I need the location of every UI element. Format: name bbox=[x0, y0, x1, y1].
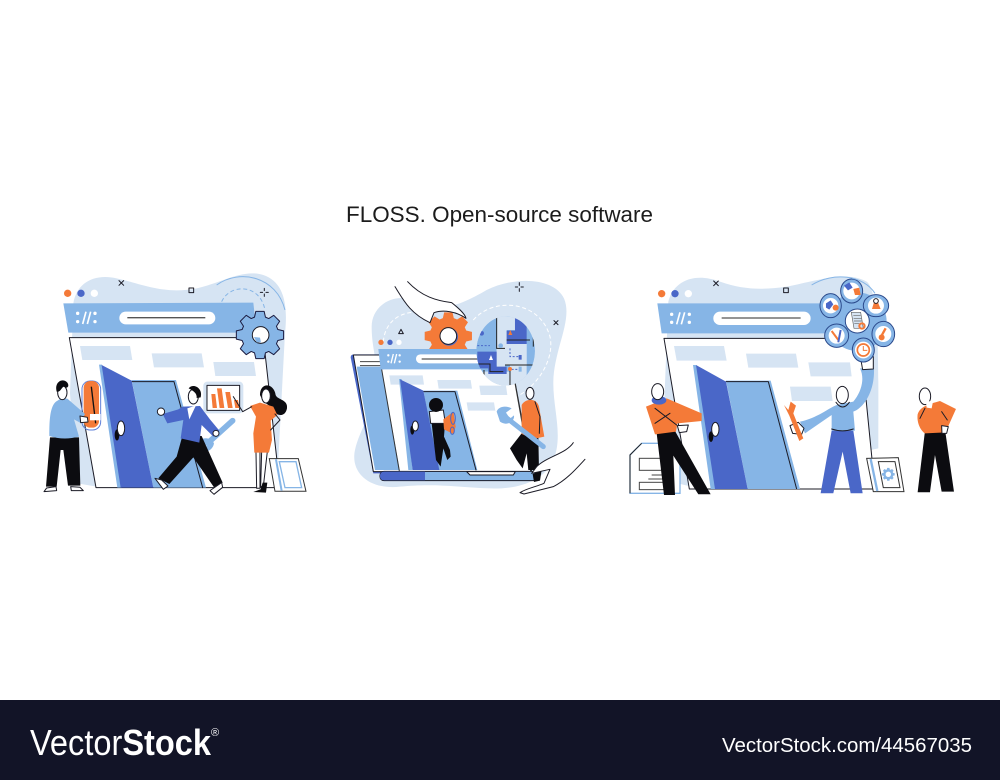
content cards bbox=[389, 375, 507, 411]
centre document bbox=[845, 309, 869, 333]
person holding door bbox=[646, 384, 711, 495]
woman with megaphone bbox=[429, 398, 456, 467]
footer image id: VectorStock.com/44567035 bbox=[722, 735, 972, 757]
decorative arcs bbox=[217, 277, 285, 310]
door bbox=[399, 379, 477, 470]
marks bbox=[399, 283, 558, 334]
petal: tools bbox=[825, 324, 849, 347]
wrench bbox=[201, 421, 233, 451]
gear bbox=[236, 311, 284, 359]
address bar bbox=[657, 303, 853, 333]
petal: clock bbox=[852, 338, 874, 362]
repair man with wrench bbox=[497, 387, 544, 470]
browser page bbox=[69, 338, 280, 488]
petal: blocks bbox=[841, 279, 863, 303]
picture frame with gear bbox=[867, 458, 904, 492]
petal: person bbox=[863, 295, 889, 317]
floppy disk bbox=[630, 443, 680, 493]
petal: cube bbox=[820, 294, 841, 318]
orange gear bbox=[425, 312, 472, 360]
outer arc bbox=[812, 277, 875, 293]
panel: middle illustration, laptop and hands bbox=[351, 281, 585, 494]
title: FLOSS. Open-source software bbox=[346, 202, 653, 227]
footer band bbox=[0, 700, 1000, 780]
background blob bbox=[70, 273, 286, 487]
slider control bbox=[82, 381, 101, 430]
bar chart card bbox=[203, 382, 243, 413]
laptop screen bbox=[351, 354, 532, 473]
dashed arcs bbox=[383, 305, 551, 397]
content cards bbox=[674, 346, 852, 401]
panel: right illustration, configuration and tools bbox=[630, 277, 956, 495]
window control dots bbox=[64, 290, 98, 297]
browser address bar bbox=[63, 303, 257, 333]
bottom hand holding laptop bbox=[520, 443, 585, 494]
person on the right thinking bbox=[917, 388, 956, 492]
door bbox=[99, 365, 206, 488]
footer logo: VectorStock bbox=[30, 722, 212, 763]
marks bbox=[714, 281, 788, 293]
background blob bbox=[663, 277, 878, 487]
door bbox=[693, 365, 800, 489]
address bar bbox=[378, 349, 483, 369]
woman with orange dress bbox=[233, 385, 287, 493]
browser page bbox=[664, 338, 875, 489]
centre person reaching up bbox=[784, 357, 874, 493]
cross and square marks bbox=[119, 281, 268, 296]
laptop base bbox=[380, 471, 537, 481]
panel: left illustration, team at the open door bbox=[44, 273, 306, 494]
magnifier circuit lens bbox=[475, 316, 537, 387]
window dots bbox=[378, 340, 402, 345]
businessman bbox=[155, 386, 223, 494]
flower of service icons bbox=[812, 277, 895, 362]
person with slider bbox=[44, 380, 88, 492]
top hand holding gear bbox=[395, 282, 466, 323]
content cards bbox=[80, 346, 256, 376]
petal: key bbox=[872, 321, 895, 347]
background blob bbox=[354, 281, 566, 489]
picture frame bbox=[269, 459, 306, 491]
registered mark: ® bbox=[211, 727, 219, 739]
window dots bbox=[658, 290, 692, 297]
